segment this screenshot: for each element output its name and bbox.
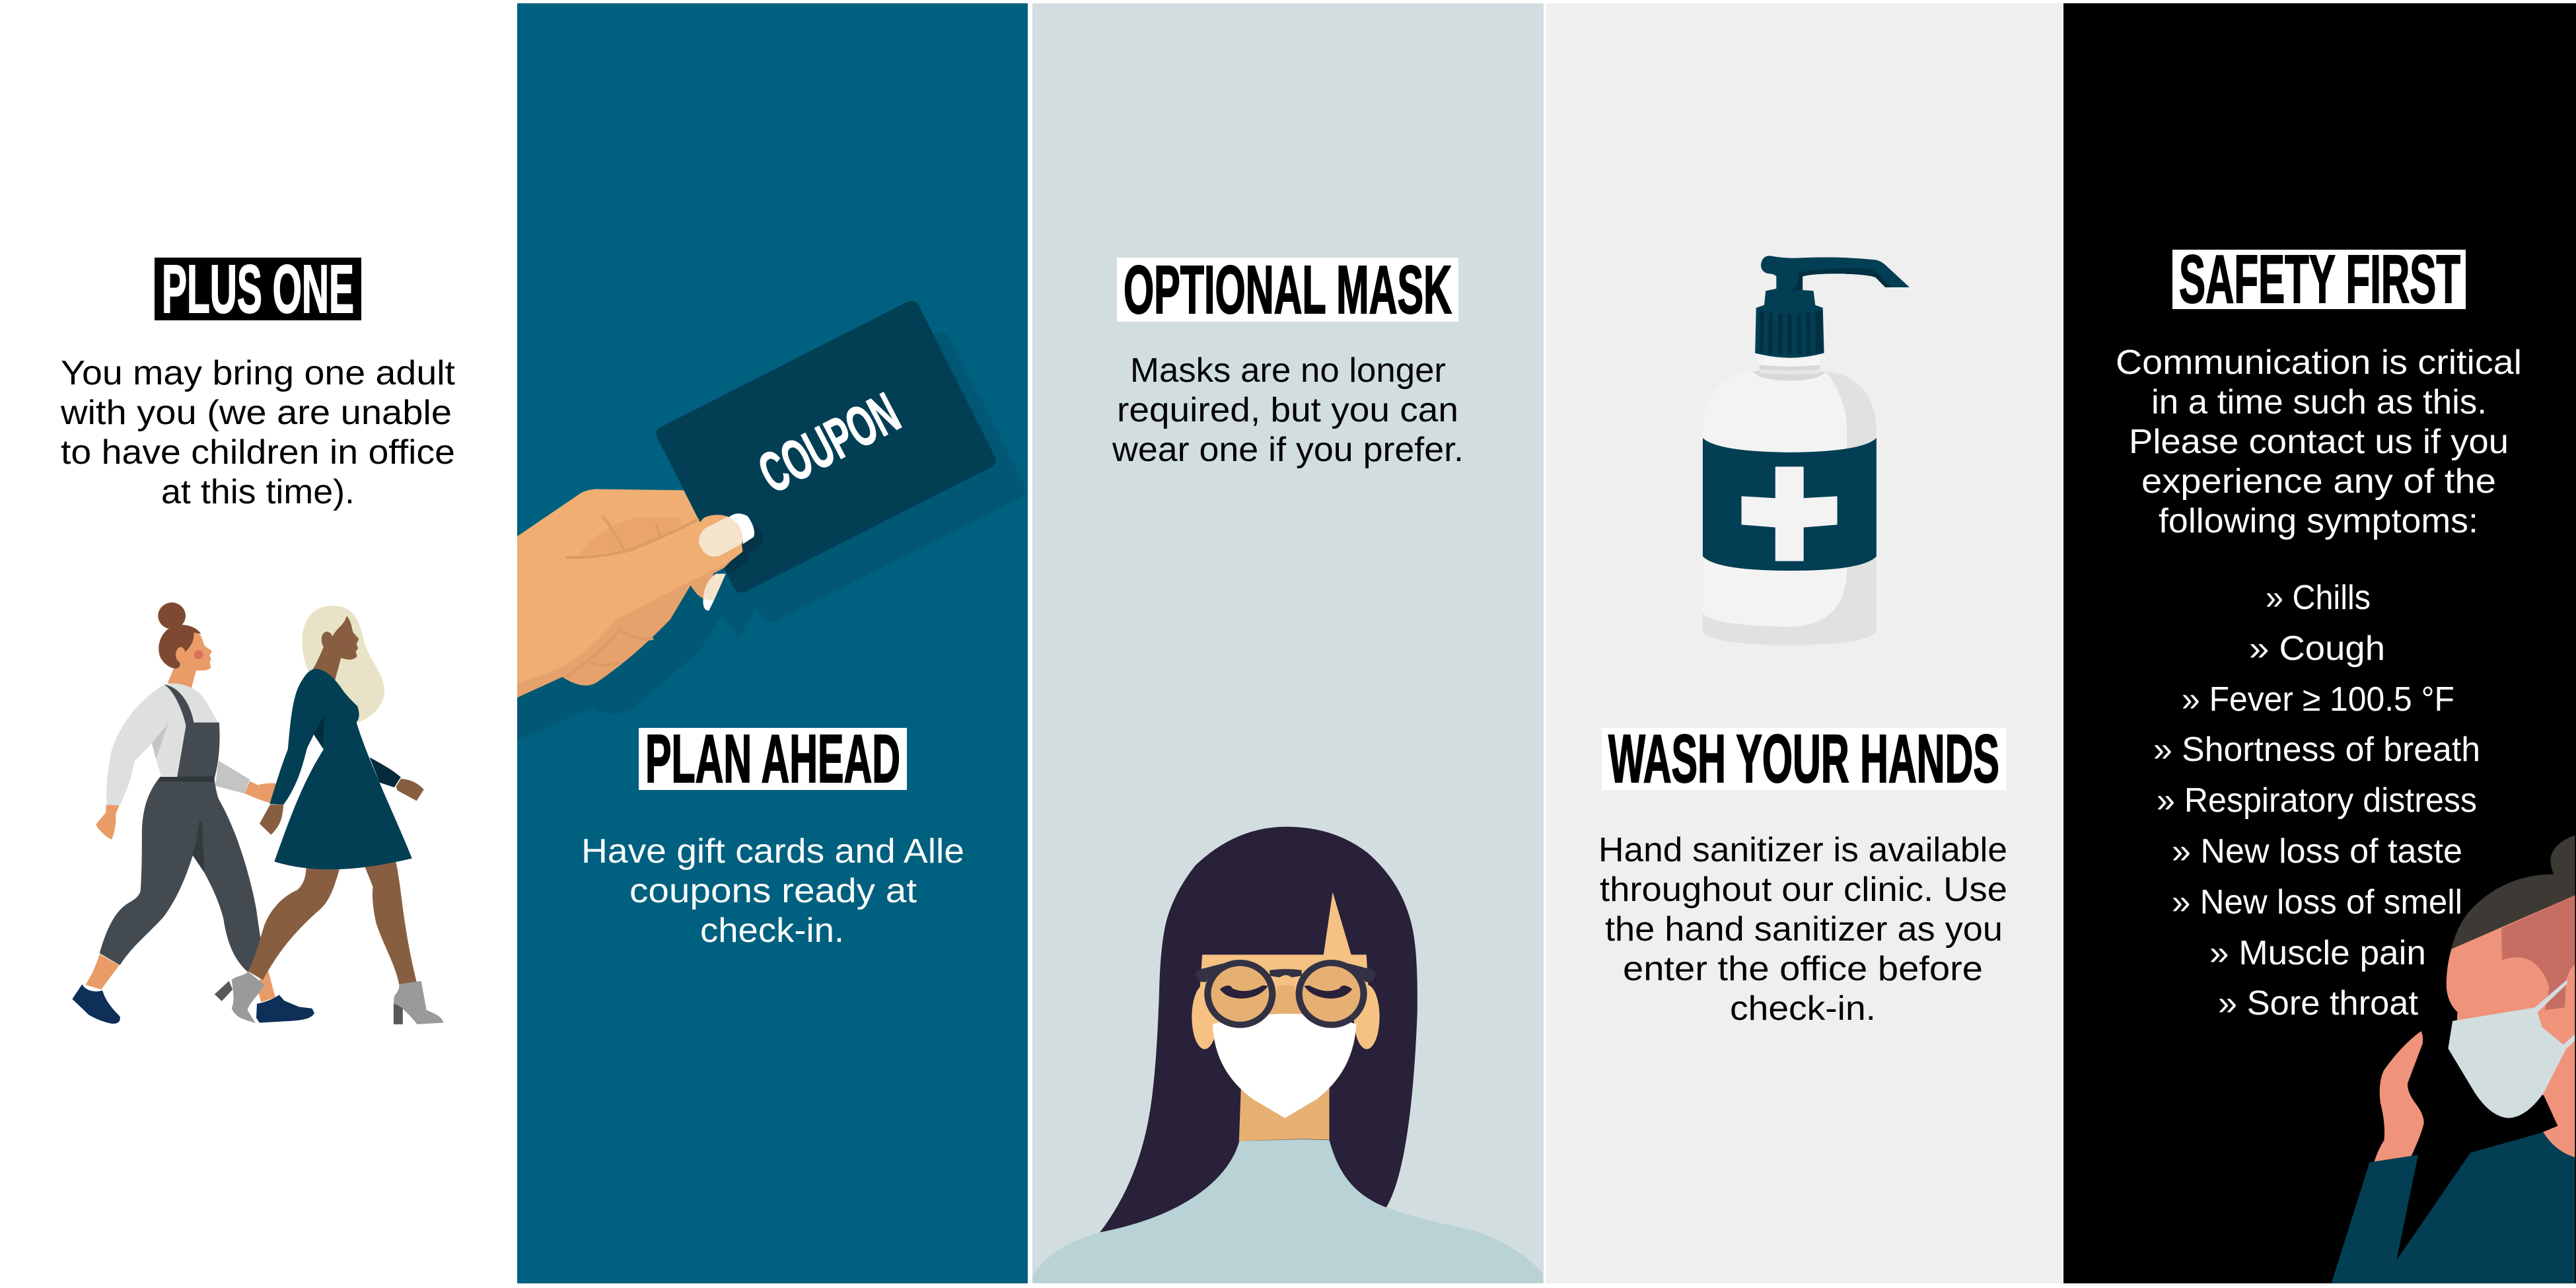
- heading: plus one: PLUS ONE: [162, 251, 354, 327]
- text block: wash your hands: enter the office before: [1623, 950, 1983, 988]
- panel: optional mask: [1032, 3, 1544, 1283]
- illustration: two women walking: [72, 602, 443, 1024]
- text block: optional mask: wear one if you prefer.: [1112, 431, 1464, 469]
- text block: safety first: following symptoms:: [2159, 502, 2478, 540]
- text block: wash your hands: check-in.: [1730, 989, 1876, 1028]
- text block: optional mask: Masks are no longer: [1130, 351, 1446, 390]
- text block: optional mask: required, but you can: [1117, 391, 1458, 429]
- text block: optional mask: [1112, 351, 1464, 469]
- heading: plan ahead: [639, 721, 907, 797]
- illustration: hand holding coupon card: [517, 301, 1026, 740]
- text block: safety first: experience any of the: [2141, 462, 2496, 501]
- text block: wash your hands: Hand sanitizer is available: [1598, 831, 2007, 869]
- woman with overalls: [72, 602, 314, 1024]
- coupon label: COUPON: [749, 381, 910, 505]
- heading: wash your hands: WASH YOUR HANDS: [1608, 721, 1999, 797]
- heading: optional mask: [1117, 252, 1458, 328]
- symptom list: » Muscle pain: [2209, 934, 2426, 972]
- symptom list: » Shortness of breath: [2153, 731, 2480, 769]
- woman with teal dress: [215, 606, 443, 1024]
- text block: safety first: [2116, 343, 2522, 540]
- text block: safety first: Communication is critical: [2116, 343, 2522, 382]
- symptom list: » Chills: [2266, 579, 2371, 617]
- text block: plus one: with you (we are unable: [60, 394, 452, 432]
- text block: wash your hands: throughout our clinic. Use: [1600, 871, 2007, 909]
- symptom list: » Fever ≥ 100.5 °F: [2182, 680, 2454, 719]
- text block: safety first: Please contact us if you: [2129, 423, 2509, 461]
- panel: plan ahead: [517, 3, 1028, 1283]
- glasses: [1196, 960, 1376, 1025]
- panel: safety first: [2063, 3, 2576, 1283]
- panel: plus one: [0, 3, 517, 1283]
- panel: wash your hands: [1546, 3, 2062, 1283]
- text block: plus one: You may bring one adult: [61, 354, 456, 392]
- text block: plan ahead: [581, 832, 964, 950]
- illustration: sanitizer bottle: [1703, 256, 1910, 645]
- symptom list: [2153, 579, 2480, 1022]
- illustration: woman in mask and glasses: [1032, 827, 1543, 1283]
- text block: plus one: at this time).: [161, 473, 355, 511]
- text block: plus one: to have children in office: [61, 433, 455, 472]
- heading: optional mask: OPTIONAL MASK: [1124, 252, 1452, 328]
- text block: plan ahead: check-in.: [700, 912, 844, 950]
- symptom list: » Cough: [2249, 629, 2385, 668]
- text block: plan ahead: Have gift cards and Alle: [581, 832, 964, 871]
- text block: plus one: [60, 354, 456, 511]
- text block: wash your hands: [1598, 831, 2007, 1028]
- heading: wash your hands: [1602, 721, 2006, 797]
- symptom list: » Sore throat: [2218, 984, 2419, 1022]
- illustration: person in mask touching face: [2332, 836, 2575, 1283]
- symptom list: » New loss of taste: [2172, 832, 2462, 871]
- heading: plus one: [155, 251, 361, 327]
- text block: wash your hands: the hand sanitizer as you: [1605, 910, 2003, 948]
- symptom list: » New loss of smell: [2172, 883, 2462, 921]
- heading: plan ahead: PLAN AHEAD: [645, 721, 900, 797]
- text block: safety first: in a time such as this.: [2151, 383, 2487, 421]
- text block: plan ahead: coupons ready at: [629, 872, 917, 910]
- symptom list: » Respiratory distress: [2157, 781, 2477, 820]
